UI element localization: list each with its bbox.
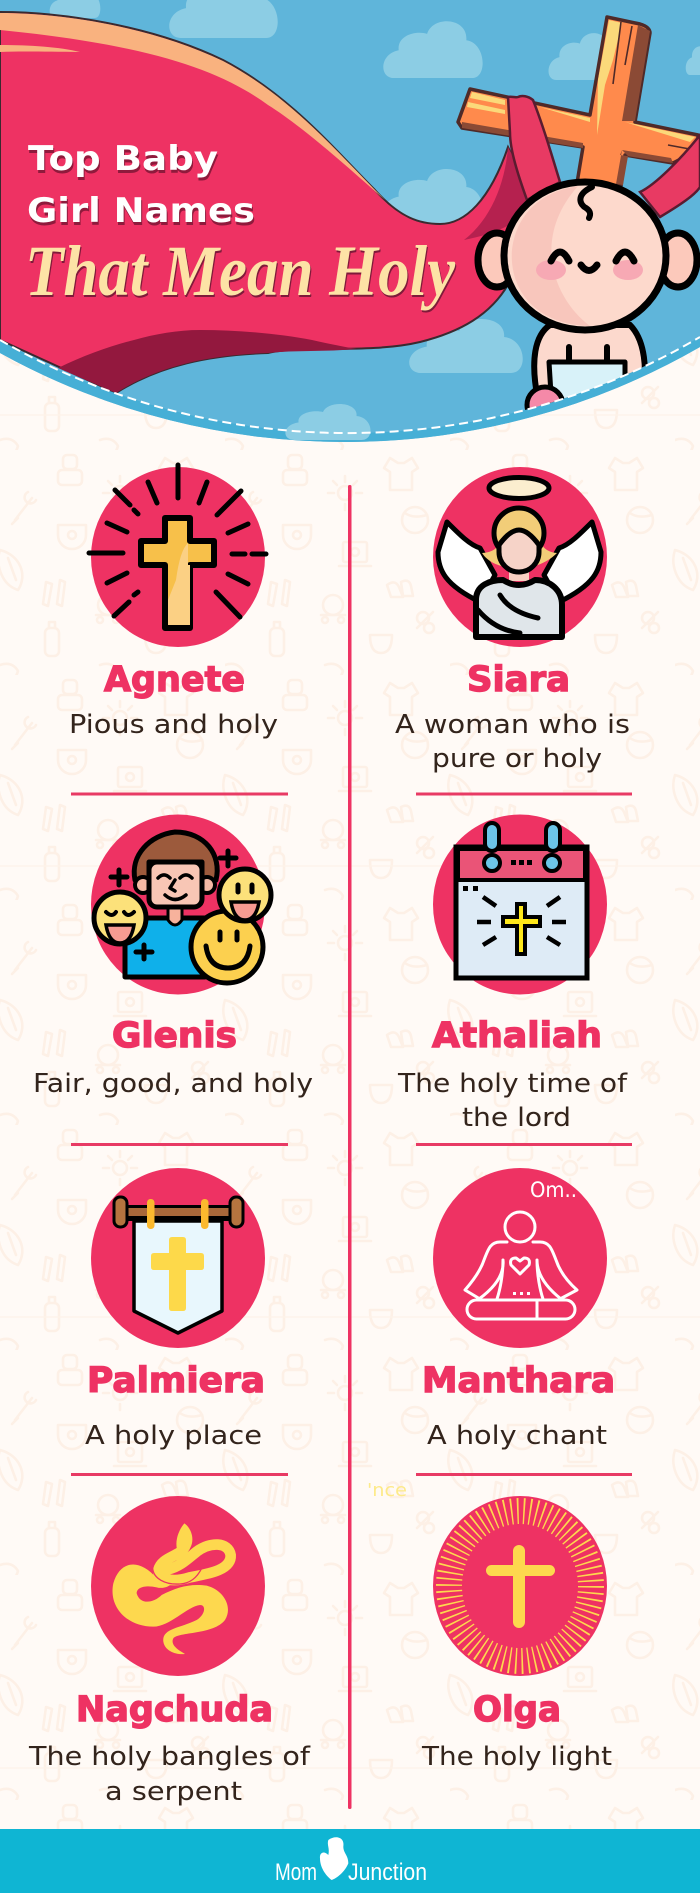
meaning: A holy place <box>85 1421 262 1451</box>
red scarf left <box>508 96 560 200</box>
icon: meditating figure <box>433 1168 607 1348</box>
meaning: a serpent <box>105 1777 242 1807</box>
header illustration <box>0 0 700 442</box>
name: Agnete <box>104 660 245 700</box>
title: Girl Names <box>27 191 255 231</box>
ribbon and baby <box>0 12 700 423</box>
row dividers <box>71 792 632 1476</box>
name: Manthara <box>422 1361 615 1401</box>
meaning: Pious and holy <box>69 710 278 740</box>
curved band edge <box>0 337 700 442</box>
center divider <box>348 485 352 1809</box>
logo: MomJunction <box>275 1837 427 1886</box>
ribbon highlight <box>0 45 80 52</box>
panel: Manthara <box>422 1168 615 1451</box>
name: Palmiera <box>87 1361 265 1401</box>
panel: Glenis <box>33 814 313 1099</box>
meaning <box>28 1742 311 1807</box>
icon: banner with cross <box>91 1168 265 1348</box>
meaning: A woman who is <box>395 710 630 740</box>
meaning: Fair, good, and holy <box>33 1069 313 1099</box>
footer band <box>0 1829 700 1893</box>
meaning: A holy chant <box>427 1421 607 1451</box>
title: Top Baby <box>28 139 218 179</box>
baby hair curl <box>580 187 592 218</box>
name: Olga <box>473 1690 561 1730</box>
baby hand <box>524 384 564 410</box>
name: Nagchuda <box>76 1690 273 1730</box>
panel: Nagchuda <box>28 1496 311 1807</box>
meaning: The holy bangles of <box>28 1742 311 1772</box>
panel: Olga <box>421 1496 612 1772</box>
logo: MomJunction: Mom <box>275 1859 317 1886</box>
meaning <box>397 1069 628 1133</box>
name: Athaliah <box>432 1016 602 1056</box>
dashed stitching <box>0 337 700 433</box>
icon: red circle <box>91 1496 265 1676</box>
title: That Mean Holy <box>25 231 456 311</box>
baby eyes and mouth <box>551 252 634 270</box>
meaning: pure or holy <box>432 744 602 774</box>
sky background <box>0 0 700 442</box>
icon: calendar with cross <box>433 814 607 994</box>
meaning: the lord <box>462 1103 571 1133</box>
icon: shining cross <box>89 465 266 647</box>
meaning: The holy time of <box>397 1069 628 1099</box>
meaning <box>395 710 630 774</box>
icon: man with smileys <box>91 814 271 994</box>
panel: Athaliah <box>397 814 628 1133</box>
clouds <box>50 0 700 440</box>
wooden cross <box>458 17 698 186</box>
logo: MomJunction: Junction <box>348 1859 427 1886</box>
name: Glenis <box>112 1016 237 1056</box>
panel: Agnete <box>69 465 278 740</box>
panel: Palmiera <box>85 1168 265 1451</box>
head shading <box>512 186 590 326</box>
baby cheeks <box>536 260 643 280</box>
panel: Siara <box>395 467 630 774</box>
baby body <box>534 325 645 400</box>
baby head <box>504 182 666 330</box>
scarf tail fold <box>464 147 530 240</box>
icon: serpent <box>113 1523 231 1654</box>
red ribbon <box>0 12 540 393</box>
stray yellow text fragment: 'nce <box>367 1480 407 1501</box>
baby ears <box>478 233 697 287</box>
name: Siara <box>467 660 570 700</box>
icon: radiant cross <box>433 1496 607 1676</box>
icon: meditating figure: Om.. <box>530 1178 577 1202</box>
diaper <box>549 347 625 410</box>
red scarf right <box>640 135 700 217</box>
title <box>25 139 456 311</box>
ribbon shadow fold <box>58 330 357 393</box>
icon: angel <box>433 467 607 647</box>
ribbon peach band <box>0 13 385 200</box>
meaning: The holy light <box>421 1742 612 1772</box>
